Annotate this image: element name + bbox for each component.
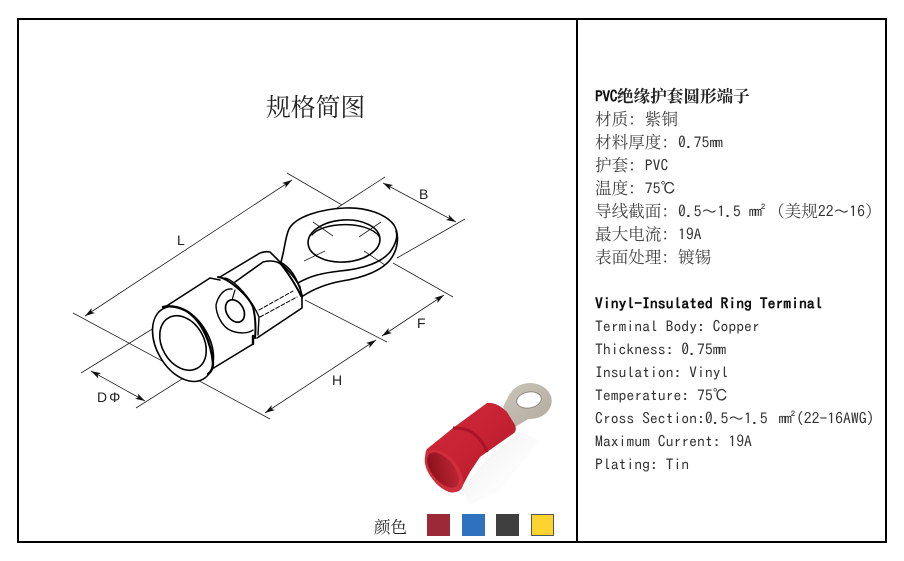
swatch: blue — [462, 514, 485, 536]
text block: English specifications — [595, 295, 874, 472]
insulation: Insulation: Vinyl — [595, 364, 728, 380]
column divider — [576, 19, 578, 541]
temperature: 温度：75℃ — [595, 175, 676, 199]
dimension label F: F — [417, 315, 426, 331]
terminal body: Terminal Body: Copper — [595, 318, 760, 334]
front sleeve — [140, 278, 253, 392]
heading: diagram title: 规格简图 — [266, 88, 365, 124]
color legend label: 颜色 — [374, 514, 407, 538]
thickness: 材料厚度：0.75mm — [595, 129, 721, 153]
swatch: red — [427, 514, 450, 536]
maximum current: 最大电流：19A — [595, 221, 702, 245]
plating: Plating: Tin — [595, 456, 689, 472]
wire cross section: 导线截面：0.5～1.5 mm²（美规22～16） — [595, 198, 882, 222]
dimension label D phi: DΦ — [97, 389, 122, 405]
swatch: yellow — [531, 514, 554, 536]
sheath: 护套：PVC — [595, 152, 668, 176]
Chinese heading: PVC绝缘护套圆形端子 — [595, 83, 750, 107]
crimp barrel — [216, 252, 302, 344]
maximum current: Maximum Current: 19A — [595, 433, 752, 449]
material: 材质：紫铜 — [595, 106, 678, 130]
English heading: Vinyl-Insulated Ring Terminal — [595, 295, 822, 311]
cross section: Cross Section:0.5～1.5 mm²(22-16AWG) — [595, 410, 874, 426]
terminal line art — [140, 208, 397, 392]
ring tongue — [281, 208, 397, 296]
dimension label L: L — [177, 232, 185, 248]
text block: Chinese specifications — [595, 83, 882, 268]
surface treatment: 表面处理：镀锡 — [595, 244, 711, 268]
temperature: Temperature: 75℃ — [595, 387, 728, 403]
swatch: black — [496, 514, 519, 536]
dimension label B: B — [419, 186, 428, 202]
thickness: Thickness: 0.75mm — [595, 341, 724, 357]
dimension label H: H — [332, 372, 342, 388]
